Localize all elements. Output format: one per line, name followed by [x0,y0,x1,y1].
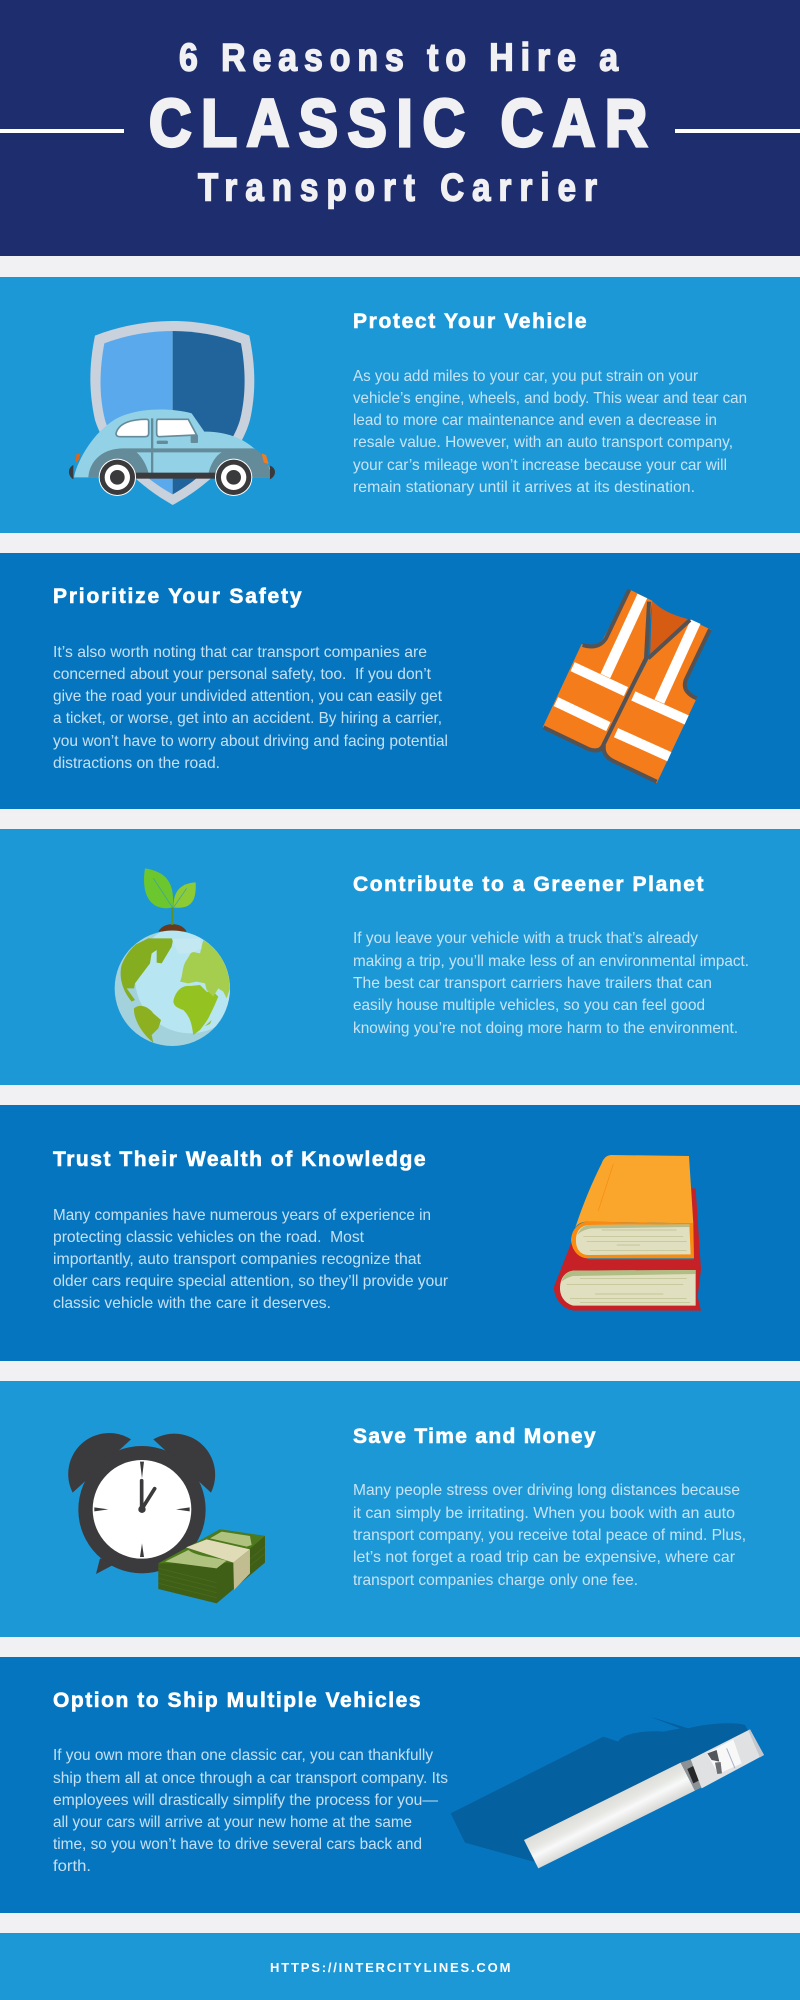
icon: truck from above with shadow [451,1717,764,1868]
heading: Contribute to a Greener Planet [353,873,706,896]
body text: importantly, auto transport companies recognize that [53,1251,422,1268]
icon: globe with sprout [114,868,230,1046]
body text: It’s also worth noting that car transport companies are [53,644,427,661]
website url: HTTPS://INTERCITYLINES.COM [270,1960,513,1975]
body text: time, so you won’t have to drive several cars back and [53,1836,422,1853]
body text: employees will drastically simplify the process for you— [53,1792,438,1809]
icon: safety vest [543,589,712,783]
body text: transport companies charge only one fee. [353,1572,638,1589]
body text: it can simply be irritating. When you book with an auto [353,1505,735,1522]
body text: all your cars will arrive at your new home at the same [53,1814,412,1831]
body text: making a trip, you’ll make less of an environmental impact. [353,953,749,970]
panel: trust their wealth of knowledge [0,1105,800,1361]
body text: protecting classic vehicles on the road. Most [53,1229,365,1246]
body text: knowing you’re not doing more harm to the environment. [353,1020,738,1037]
body text: classic vehicle with the care it deserves. [53,1295,331,1312]
body text [53,644,448,772]
body text: lead to more car maintenance and even a decrease in [353,412,717,429]
title line 2: CLASSIC CAR [149,86,657,161]
body text: The best car transport carriers have trailers that can [353,975,712,992]
body text: give the road your undivided attention, you can easily get [53,688,443,705]
heading: Prioritize Your Safety [53,585,304,608]
body text: concerned about your personal safety, too. If you don’t [53,666,432,683]
body text [353,368,747,496]
heading: Option to Ship Multiple Vehicles [53,1689,423,1712]
body text: remain stationary until it arrives at its destination. [353,479,695,496]
body text: your car’s mileage won’t increase because your car will [353,457,727,474]
icon: stacked books [554,1155,701,1311]
body text: vehicle’s engine, wheels, and body. This wear and tear can [353,390,747,407]
body text [353,1482,746,1589]
panel: contribute to a greener planet [0,829,800,1085]
body text: transport company, you receive total peace of mind. Plus, [353,1527,746,1544]
panel: save time and money [0,1381,800,1637]
body text: If you own more than one classic car, you can thankfully [53,1747,433,1764]
panel: option to ship multiple vehicles [0,1657,800,1913]
title line 3: Transport Carrier [198,166,605,210]
heading: Protect Your Vehicle [353,310,589,333]
body text: you won’t have to worry about driving and facing potential [53,733,448,750]
body text: a ticket, or worse, get into an accident. By hiring a carrier, [53,710,442,727]
title line 1: 6 Reasons to Hire a [179,36,625,80]
body text: let’s not forget a road trip can be expensive, where car [353,1549,736,1566]
body text [353,930,749,1037]
body text: Many companies have numerous years of experience in [53,1207,431,1224]
body text: Many people stress over driving long distances because [353,1482,740,1499]
body text: ship them all at once through a car transport company. Its [53,1770,448,1787]
footer banner [0,1933,800,2000]
panel: prioritize your safety [0,553,800,809]
icon: shield and car [69,321,275,505]
heading: Save Time and Money [353,1425,598,1448]
body text: easily house multiple vehicles, so you can feel good [353,997,705,1014]
body text [53,1207,449,1312]
body text: forth. [53,1858,91,1875]
icon: alarm clock and cash [68,1433,265,1603]
body text: older cars require special attention, so they’ll provide your [53,1273,449,1290]
body text: resale value. However, with an auto transport company, [353,434,733,451]
body text [53,1747,448,1875]
heading: Trust Their Wealth of Knowledge [53,1148,428,1171]
header banner [0,0,800,256]
body text: As you add miles to your car, you put strain on your [353,368,699,385]
panel: protect your vehicle [0,277,800,533]
body text: If you leave your vehicle with a truck that’s already [353,930,698,947]
body text: distractions on the road. [53,755,220,772]
